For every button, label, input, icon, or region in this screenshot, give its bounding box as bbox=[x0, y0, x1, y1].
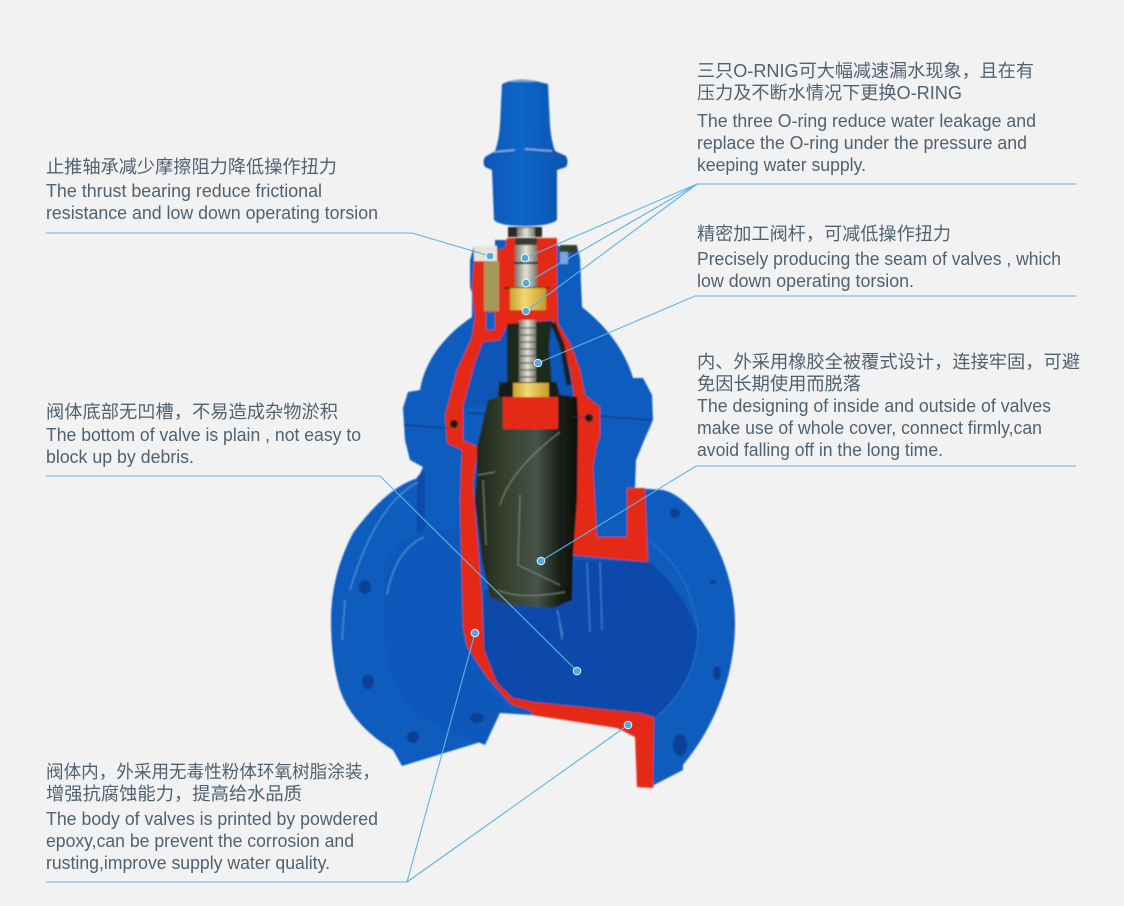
icon: disc highlights bbox=[478, 432, 565, 596]
icon: cap top and highlights bbox=[493, 81, 552, 152]
icon: bore ribs bbox=[557, 562, 602, 640]
text block: plain bottom bbox=[46, 402, 361, 467]
text block: rubber cover: 免因长期使用而脱落 bbox=[697, 374, 861, 394]
text block: epoxy coating bbox=[46, 762, 380, 873]
icon: operating cap bbox=[484, 80, 568, 226]
icon: thread bbox=[518, 320, 537, 385]
icon: inner bore bbox=[484, 560, 697, 717]
text block: epoxy coating: epoxy,can be prevent the corrosion and bbox=[46, 831, 354, 851]
leader line and dot: plain bottom bbox=[46, 476, 581, 675]
icon: right bolt head bbox=[560, 245, 577, 264]
leader lines and dots: thrust bearing bbox=[46, 233, 494, 260]
text block: three O-rings: The three O-ring reduce water leakage and bbox=[697, 111, 1036, 131]
leader lines and dots: three O-rings bbox=[521, 184, 1076, 315]
text block: rubber cover: The designing of inside and outside of valves bbox=[697, 396, 1051, 416]
text block: plain bottom: 阀体底部无凹槽，不易造成杂物淤积 bbox=[46, 402, 338, 422]
text block: thrust bearing bbox=[46, 157, 378, 223]
icon: valve body blue casting bbox=[331, 240, 735, 788]
text block: three O-rings: replace the O-ring under the pressure and bbox=[697, 133, 1027, 153]
leader lines and dots: epoxy coating bbox=[46, 629, 632, 882]
text block: plain bottom: The bottom of valve is plain , not easy to bbox=[46, 425, 361, 445]
text block: epoxy coating: rusting,improve supply water quality. bbox=[46, 853, 330, 873]
text block: rubber cover bbox=[697, 352, 1080, 460]
text block: rubber cover: make use of whole cover, connect firmly,can bbox=[697, 418, 1042, 438]
leader line and dot: stem bbox=[534, 296, 1076, 367]
icon: dark liner arc bbox=[553, 323, 569, 385]
text block: three O-rings: 三只O-RNIG可大幅减速漏水现象，且在有 bbox=[697, 61, 1034, 81]
text block: epoxy coating: The body of valves is printed by powdered bbox=[46, 809, 378, 829]
icon: left flange face bbox=[384, 530, 510, 745]
icon: wedge disc bbox=[475, 384, 578, 608]
icon: bonnet joint bbox=[404, 413, 650, 428]
icon: brass stem nut bbox=[499, 382, 557, 397]
icon: gasket seals bbox=[450, 414, 593, 428]
text block: plain bottom: block up by debris. bbox=[46, 447, 194, 467]
icon: red wedge nut bbox=[503, 397, 558, 429]
text block: rubber cover: avoid falling off in the long time. bbox=[697, 440, 943, 460]
leader line and dot: rubber cover bbox=[537, 466, 1076, 565]
text block: thrust bearing: resistance and low down operating torsion bbox=[46, 203, 378, 223]
text block: three O-rings: 压力及不断水情况下更换O-RING bbox=[697, 83, 962, 103]
icon: brass bushing bbox=[510, 288, 546, 310]
text block: precise stem: 精密加工阀杆，可减低操作扭力 bbox=[697, 224, 951, 244]
gate valve cutaway illustration bbox=[331, 80, 735, 788]
icon: stem with O-rings bbox=[504, 227, 550, 290]
text block: three O-rings bbox=[697, 61, 1036, 175]
text block: rubber cover: 内、外采用橡胶全被覆式设计，连接牢固，可避 bbox=[697, 352, 1080, 372]
icon: right flange ring bbox=[650, 542, 698, 716]
icon: bonnet chamber bbox=[463, 320, 575, 407]
text block: thrust bearing: The thrust bearing reduce frictional bbox=[46, 181, 322, 201]
text block: precise stem bbox=[697, 224, 1061, 291]
icon: red section of body bbox=[445, 238, 654, 788]
icon: flange bolt holes bbox=[359, 508, 721, 756]
text block: precise stem: Precisely producing the seam of valves , which bbox=[697, 249, 1061, 269]
text block: precise stem: low down operating torsion. bbox=[697, 271, 914, 291]
text block: epoxy coating: 增强抗腐蚀能力，提高给水品质 bbox=[46, 784, 302, 804]
icon: left flange highlight bbox=[342, 482, 424, 640]
text block: epoxy coating: 阀体内，外采用无毒性粉体环氧树脂涂装， bbox=[46, 762, 380, 782]
text block: thrust bearing: 止推轴承减少摩擦阻力降低操作扭力 bbox=[46, 157, 337, 177]
icon: left flange side shade bbox=[417, 470, 425, 538]
icon: thrust bearing bolt bbox=[474, 246, 499, 330]
icon: screw thread housing bbox=[507, 321, 552, 385]
text block: three O-rings: keeping water supply. bbox=[697, 155, 866, 175]
